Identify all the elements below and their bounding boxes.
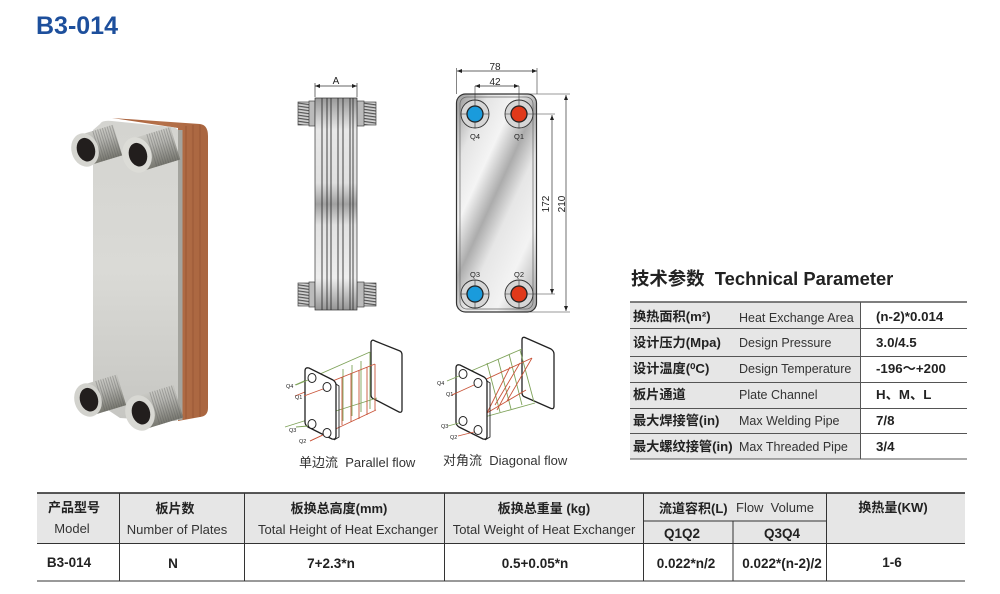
back plate (522, 337, 554, 409)
column: flow volume: 0.022*(n-2)/2 (742, 556, 822, 571)
row: design temperature (633, 360, 946, 376)
column: number of plates (127, 501, 228, 571)
parallel flow caption: 单边流 Parallel flow (299, 455, 416, 470)
port Q3: Q3 (470, 270, 480, 279)
column: number of plates: N (168, 556, 178, 571)
column: flow volume (657, 500, 822, 571)
parallel flow diagram (285, 340, 402, 445)
port Q2 (505, 270, 533, 308)
column: total weight: 0.5+0.05*n (502, 556, 568, 571)
row: design temperature: Design Temperature (739, 362, 851, 376)
column: total height: Total Height of Heat Exchanger (258, 522, 439, 537)
diagonal flow diagram: Q3 (441, 424, 448, 430)
dimension 78: 78 (489, 62, 501, 73)
bottom left fitting (70, 374, 126, 420)
column: heat capacity: 换热量(KW) (858, 500, 928, 515)
column: flow volume: Q3Q4 (764, 526, 800, 541)
title: B3-014 (36, 12, 118, 40)
dimension 42 (475, 77, 519, 114)
row: max threaded pipe: 最大螺纹接管(in) (633, 438, 733, 454)
top left fitting (67, 124, 122, 170)
dimension A: A (333, 76, 340, 87)
port Q1 (505, 100, 533, 141)
row: plate channel: 板片通道 (633, 386, 686, 402)
top right fitting (118, 126, 181, 176)
column: heat capacity: 1-6 (882, 555, 902, 570)
copper plate stack (112, 118, 208, 421)
row: max threaded pipe (633, 438, 895, 454)
flow lines (285, 352, 377, 441)
column: total height: 板换总高度(mm) (291, 501, 387, 516)
row: heat exchange area (633, 308, 944, 325)
model table (37, 493, 965, 581)
header background (37, 493, 965, 543)
row: max welding pipe (633, 412, 894, 428)
column: model: 产品型号 (48, 500, 100, 515)
column: model: Model (54, 521, 90, 536)
row: design pressure (633, 335, 917, 350)
front plate (305, 368, 336, 439)
technical parameter heading: 技术参数 Technical Parameter (631, 268, 893, 289)
plate (456, 94, 536, 312)
column: flow volume: 0.022*n/2 (657, 556, 715, 571)
column: flow volume: Flow Volume (736, 500, 814, 515)
dimension 172: 172 (541, 195, 552, 212)
port Q3 (461, 270, 489, 308)
parallel flow diagram: Q4 (286, 384, 293, 390)
row: heat exchange area: Heat Exchange Area (739, 311, 854, 325)
row: max welding pipe: 最大焊接管(in) (633, 412, 719, 428)
row: heat exchange area: 换热面积(m²) (633, 308, 711, 324)
row: max threaded pipe: 3/4 (876, 439, 895, 454)
label column background (630, 302, 860, 459)
column: total weight: 板换总重量 (kg) (498, 501, 590, 516)
column: total height: 7+2.3*n (307, 556, 355, 571)
column: total weight (453, 501, 636, 571)
column: flow volume: Q1Q2 (664, 526, 700, 541)
flow lines (452, 349, 535, 424)
technical parameter table (630, 302, 967, 459)
back plate (371, 340, 402, 412)
front plate (456, 365, 487, 439)
row: heat exchange area: (n-2)*0.014 (876, 309, 944, 324)
plate pack (315, 98, 357, 310)
port Q2: Q2 (514, 270, 524, 279)
parallel flow diagram: Q1 (295, 395, 302, 401)
row: plate channel: H、M、L (876, 387, 931, 402)
dimension 210: 210 (557, 195, 568, 212)
column: number of plates: 板片数 (155, 501, 195, 516)
threaded ports (298, 101, 376, 307)
column: flow volume: 流道容积(L) (659, 501, 728, 516)
diagonal flow caption: 对角流 Diagonal flow (443, 453, 568, 468)
parallel flow diagram: Q3 (289, 428, 296, 434)
bottom right fitting (121, 384, 184, 434)
row: design pressure: 设计压力(Mpa) (633, 335, 721, 350)
dimension 78 (456, 62, 537, 94)
column: model (47, 500, 100, 570)
column: number of plates: Number of Plates (127, 522, 228, 537)
port Q4: Q4 (470, 132, 480, 141)
front view drawing (456, 62, 570, 312)
row: plate channel (633, 386, 931, 402)
column: model: B3-014 (47, 555, 92, 570)
row: design pressure: 3.0/4.5 (876, 335, 917, 350)
diagonal flow diagram (437, 337, 554, 441)
row: plate channel: Plate Channel (739, 388, 818, 402)
dimension A (315, 76, 357, 97)
column: total height (258, 501, 439, 571)
row: max welding pipe: Max Welding Pipe (739, 414, 840, 428)
parallel flow diagram: Q2 (299, 439, 306, 445)
product photo (67, 118, 208, 434)
side view drawing (298, 76, 376, 310)
row: max welding pipe: 7/8 (876, 413, 894, 428)
column: total weight: Total Weight of Heat Exchanger (453, 522, 636, 537)
diagonal flow diagram: Q2 (450, 435, 457, 441)
row: design pressure: Design Pressure (739, 336, 831, 350)
dimension 42: 42 (489, 77, 501, 88)
steel front plate (93, 121, 180, 421)
row: design temperature: -196～+200 (876, 361, 946, 376)
dimension 210 (530, 94, 570, 312)
column: heat capacity (858, 500, 928, 570)
dimension 172 (519, 114, 555, 294)
port Q4 (461, 100, 489, 141)
row: max threaded pipe: Max Threaded Pipe (739, 440, 848, 454)
row: design temperature: 设计温度(⁰C) (633, 360, 709, 376)
diagonal flow diagram: Q1 (446, 392, 453, 398)
port Q1: Q1 (514, 132, 524, 141)
diagonal flow diagram: Q4 (437, 381, 444, 387)
